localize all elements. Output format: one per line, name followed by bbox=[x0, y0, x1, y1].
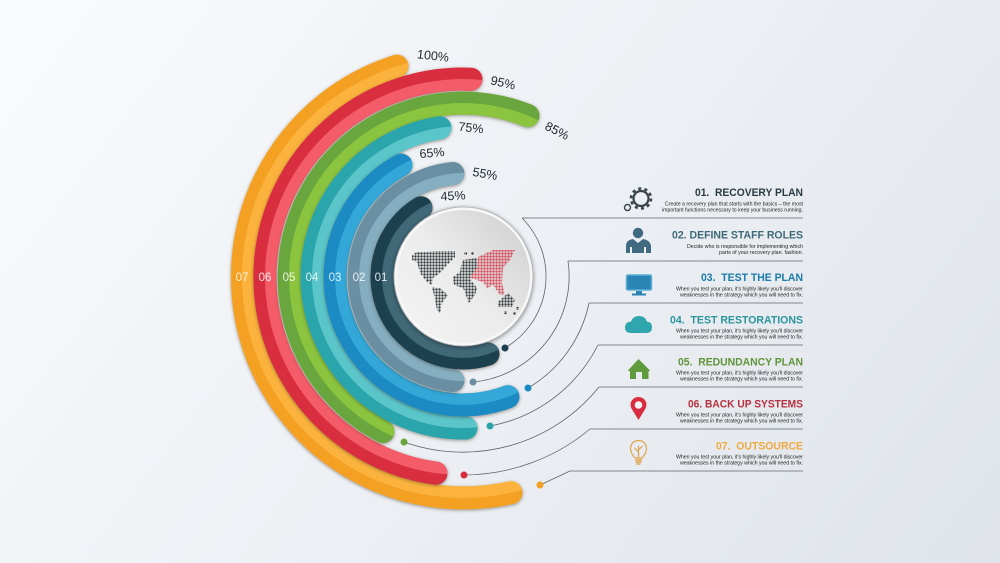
item 03 text: weaknesses in the strategy which you will need to fix. bbox=[680, 292, 803, 298]
item 05 text bbox=[676, 356, 803, 382]
icon: person bbox=[626, 228, 651, 253]
percent labels: 55% bbox=[471, 165, 499, 183]
item 05 text: weaknesses in the strategy which you will need to fix. bbox=[680, 376, 803, 382]
item 06 text: When you test your plan, it's highly likely you'll discover bbox=[676, 412, 803, 418]
item 01 text bbox=[662, 187, 804, 214]
icon: map pin bbox=[630, 397, 646, 420]
item 01 text: important functions necessary to keep your business running. bbox=[662, 208, 803, 214]
item 03 text: When you test your plan, it's highly likely you'll discover bbox=[676, 286, 803, 292]
percent labels bbox=[416, 47, 571, 204]
band numbers: 04 bbox=[306, 272, 319, 284]
percent labels: 75% bbox=[458, 120, 484, 136]
icon: gear bbox=[624, 188, 651, 210]
percent labels: 45% bbox=[440, 188, 466, 204]
icon: monitor bbox=[626, 275, 652, 296]
band numbers: 03 bbox=[329, 272, 341, 284]
arc 02 slate bbox=[359, 174, 453, 380]
divider lines bbox=[522, 218, 803, 471]
percent labels: 65% bbox=[419, 145, 445, 161]
map: europe and africa bbox=[453, 252, 477, 304]
icon: cloud bbox=[625, 316, 652, 333]
item 02 text: 02. DEFINE STAFF ROLES bbox=[672, 230, 803, 242]
arc 06 red bbox=[265, 79, 471, 473]
icon: light bulb bbox=[630, 440, 646, 464]
map: asia highlighted bbox=[470, 250, 515, 295]
arc 03 blue bbox=[335, 165, 508, 405]
band numbers: 02 bbox=[353, 272, 365, 284]
band numbers: 06 bbox=[259, 272, 271, 284]
item 06 text bbox=[676, 398, 803, 424]
item 04 text: 04. TEST RESTORATIONS bbox=[670, 314, 803, 326]
band numbers bbox=[236, 272, 387, 284]
item 04 text: weaknesses in the strategy which you will need to fix. bbox=[680, 334, 803, 340]
item 01 text: Create a recovery plan that starts with the basics – the most bbox=[665, 202, 804, 208]
percent labels: 85% bbox=[543, 119, 571, 143]
map: australia and islands bbox=[498, 293, 519, 315]
band numbers: 07 bbox=[236, 272, 248, 284]
arc 05 green bbox=[289, 103, 528, 432]
arc 04 teal bbox=[312, 128, 466, 428]
item 07 text: When you test your plan, it's highly likely you'll discover bbox=[676, 454, 803, 460]
item 06 text: 06. BACK UP SYSTEMS bbox=[688, 398, 803, 410]
item 03 text bbox=[676, 272, 803, 298]
band numbers: 05 bbox=[283, 272, 295, 284]
item 04 text: When you test your plan, it's highly likely you'll discover bbox=[676, 328, 803, 334]
connector lines bbox=[404, 218, 599, 485]
item 07 text: 07. OUTSOURCE bbox=[716, 440, 803, 452]
item 02 text: Decide who is responsible for implementing which bbox=[687, 244, 803, 250]
world map bbox=[412, 250, 519, 315]
item 05 text: When you test your plan, it's highly likely you'll discover bbox=[676, 370, 803, 376]
item 04 text bbox=[670, 314, 803, 340]
percent labels: 95% bbox=[489, 73, 517, 93]
item 03 text: 03. TEST THE PLAN bbox=[701, 272, 803, 284]
item 01 text: 01. RECOVERY PLAN bbox=[695, 187, 803, 199]
arc 01 navy bbox=[382, 208, 488, 358]
percent labels: 100% bbox=[416, 47, 450, 65]
arc 07 orange bbox=[242, 66, 511, 498]
band numbers: 01 bbox=[375, 272, 387, 284]
connector end dots bbox=[400, 344, 544, 488]
item 07 text: weaknesses in the strategy which you will need to fix. bbox=[680, 460, 803, 466]
item 07 text bbox=[676, 440, 803, 466]
item 06 text: weaknesses in the strategy which you will need to fix. bbox=[680, 418, 803, 424]
item 02 text bbox=[672, 230, 803, 256]
item 05 text: 05. REDUNDANCY PLAN bbox=[678, 356, 803, 368]
icon: house bbox=[628, 359, 650, 379]
item 02 text: parts of your recovery plan. fashion. bbox=[719, 250, 803, 256]
centre disc bbox=[394, 207, 533, 346]
map: north and south america bbox=[412, 251, 455, 313]
